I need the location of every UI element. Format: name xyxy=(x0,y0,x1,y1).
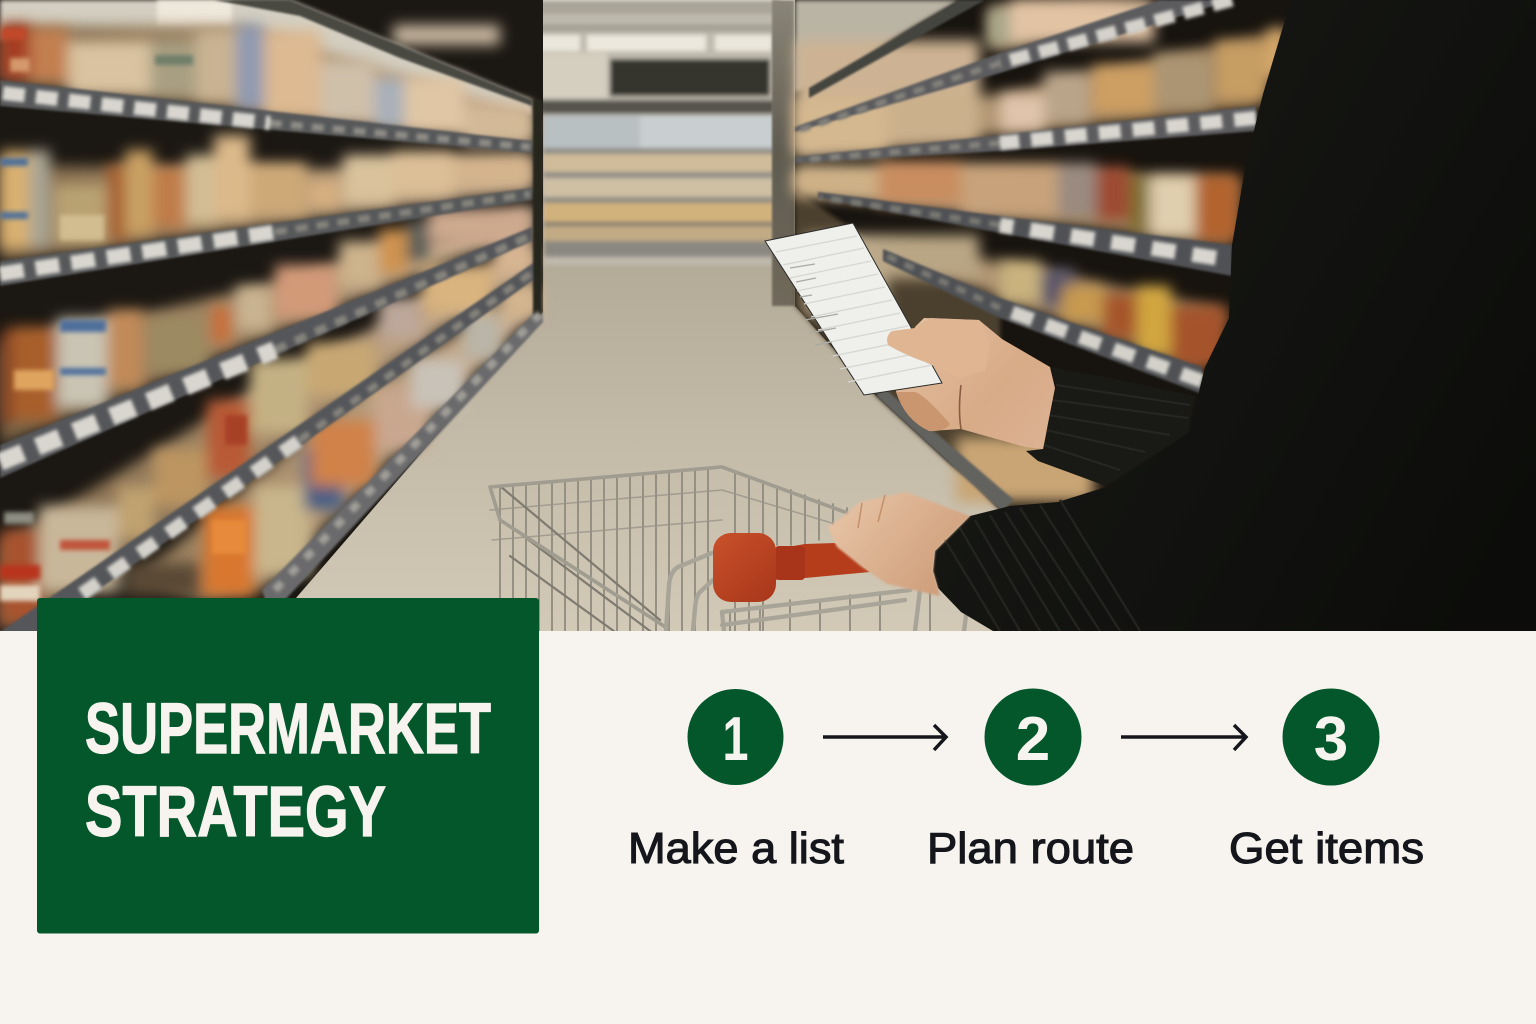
step 3 badge xyxy=(1282,688,1380,786)
left shelf backing xyxy=(0,0,543,631)
right shelf base product bands xyxy=(795,0,1287,367)
upper hand back and wrist xyxy=(896,318,1055,449)
step 3 label: Get items xyxy=(1229,824,1424,873)
palm crease xyxy=(960,385,961,429)
finger creases xyxy=(858,495,885,528)
title line 1: SUPERMARKET xyxy=(85,690,491,769)
back of aisle: ceiling, lights and far shelf xyxy=(543,0,780,266)
right shelving unit xyxy=(795,0,1300,512)
aisle floor xyxy=(296,262,998,631)
step 3 xyxy=(1229,688,1424,873)
step 3 number: 3 xyxy=(1314,705,1348,774)
step 2 label: Plan route xyxy=(927,824,1134,873)
ribbed lower sleeve cuff xyxy=(945,500,1140,631)
pillar xyxy=(772,0,795,306)
handle shaft xyxy=(770,543,870,580)
lower shelf wood tone xyxy=(795,190,1002,512)
left shelf rails xyxy=(0,0,543,660)
left shelf base product bands xyxy=(0,26,541,632)
step 1 xyxy=(628,689,844,873)
lower fingers shadow xyxy=(896,392,950,431)
upper wall xyxy=(0,0,532,115)
products on right shelves xyxy=(795,0,1287,502)
product label details xyxy=(0,28,247,601)
thumb over paper xyxy=(887,318,990,378)
title line 2: STRATEGY xyxy=(85,773,386,852)
paper ruled lines xyxy=(776,236,932,382)
step 1 number: 1 xyxy=(722,705,748,774)
left shelving unit xyxy=(0,0,543,660)
cart wires xyxy=(499,470,931,631)
step 2 badge xyxy=(984,688,1082,786)
photo: supermarket aisle with shopper xyxy=(0,0,1536,660)
upper wall corner xyxy=(795,0,960,92)
products on left shelves xyxy=(0,24,539,624)
handle cap xyxy=(713,533,776,602)
title panel xyxy=(37,598,539,934)
cuff ribs xyxy=(1044,385,1190,470)
right shelf backing xyxy=(795,0,1300,512)
red cart handle xyxy=(713,533,870,602)
sweater and shopper body xyxy=(933,0,1536,631)
step 2 number: 2 xyxy=(1016,705,1050,774)
cart side panel diagonals xyxy=(501,488,662,631)
cart rim xyxy=(490,467,872,628)
step 1 label: Make a list xyxy=(628,824,844,873)
cart horizontal wires xyxy=(490,490,855,540)
cart handle frame xyxy=(666,553,968,631)
step 2 xyxy=(927,688,1134,873)
arrow 1 to 2 xyxy=(823,725,946,750)
step 1 badge xyxy=(688,689,784,785)
left shelf price labels xyxy=(0,93,540,594)
green title card xyxy=(37,598,539,934)
arrow 2 to 3 xyxy=(1121,725,1246,750)
handwriting scribbles xyxy=(790,264,838,345)
cuff body xyxy=(1026,426,1105,486)
cuff ribs xyxy=(945,500,1140,631)
handle collar xyxy=(775,546,805,580)
upper sleeve cuff xyxy=(1026,384,1190,486)
right shelf rails xyxy=(795,0,1256,512)
process steps xyxy=(628,688,1424,873)
shopping list paper xyxy=(765,223,942,395)
shopping cart basket xyxy=(488,465,968,631)
bright wall highlight xyxy=(157,0,232,26)
lower hand on handle xyxy=(828,492,970,596)
hand shape xyxy=(828,492,970,596)
paper sheet xyxy=(765,223,942,395)
right shelf price labels xyxy=(800,0,1256,381)
